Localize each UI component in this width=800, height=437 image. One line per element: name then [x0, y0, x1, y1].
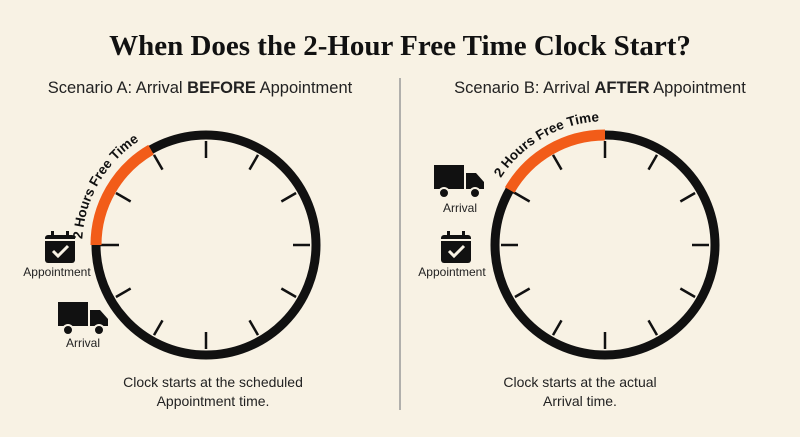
heading: scenario A: Scenario A: Arrival BEFORE Appointment [48, 79, 353, 97]
label: appointment A: Appointment [23, 265, 91, 279]
panel: scenario B [418, 79, 746, 409]
icon: calendar A [45, 231, 75, 263]
title: When Does the 2-Hour Free Time Clock Start? [109, 30, 691, 62]
orange arc B [510, 135, 605, 190]
panel: scenario B: Arrival time. [543, 393, 617, 409]
curved label A [82, 128, 164, 266]
label: arrival B: Arrival [443, 201, 477, 215]
clock B: 2 Hours Free Time [494, 114, 598, 178]
label: arrival A: Arrival [66, 336, 100, 350]
panel: scenario A: Appointment time. [157, 393, 269, 409]
clock A [73, 130, 320, 360]
curved label B [488, 121, 626, 203]
caption A: Clock starts at the scheduled [123, 374, 303, 390]
label: appointment B: Appointment [418, 265, 486, 279]
orange arc A [96, 150, 151, 245]
panel: scenario A [23, 79, 353, 409]
clock A: 2 Hours Free Time [73, 136, 138, 239]
caption B: Clock starts at the actual [503, 374, 657, 390]
clock B [490, 114, 720, 360]
icon: truck B [434, 165, 484, 198]
icon: calendar B [441, 231, 471, 263]
heading: scenario B: Scenario B: Arrival AFTER Appointment [454, 79, 746, 97]
icon: truck A [58, 302, 108, 335]
